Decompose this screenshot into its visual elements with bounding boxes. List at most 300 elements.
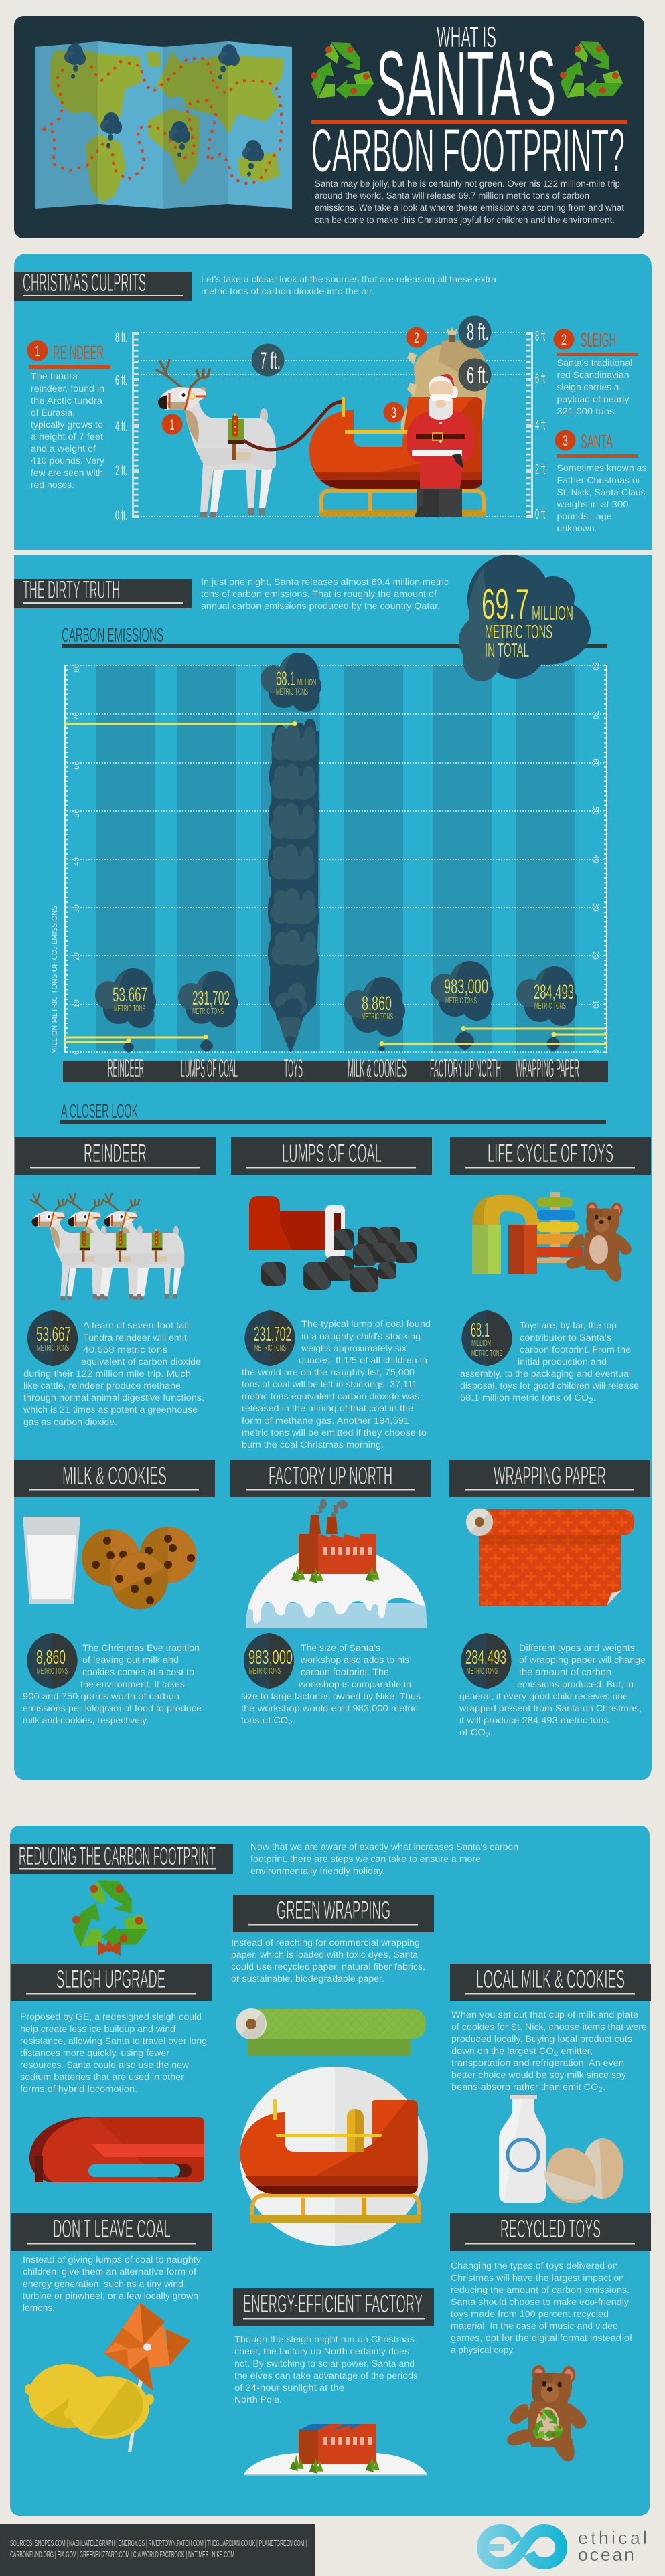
cloud: reindeer: 53,667 <box>113 984 147 1006</box>
stat: 983,000 <box>244 1633 294 1689</box>
culprits intro <box>201 274 497 296</box>
cloud: factory <box>431 961 494 1021</box>
stat: 983,000: 983,000 <box>248 1647 293 1668</box>
stat: 68.1 million: METRIC TONS <box>471 1348 502 1358</box>
text: tons of CO <box>241 1715 285 1725</box>
text <box>23 1643 202 1725</box>
title <box>311 21 627 185</box>
text: which is 21 times as potent a greenhouse <box>23 1405 198 1415</box>
culprits intro: Let's take a closer look at the sources that are releasing all these extra <box>201 274 497 284</box>
world map <box>35 33 292 214</box>
text: could use recycled paper, natural fiber fabrics, <box>231 1962 425 1972</box>
illustration: reindeer <box>157 360 276 517</box>
right axis: 80 <box>591 662 600 671</box>
text: in a naughty child's stocking <box>301 1331 421 1341</box>
label: reindeer: reindeer, found in <box>31 383 104 394</box>
bar chart: carbon emissions <box>50 653 608 1083</box>
text: reducing the amount of carbon emissions. <box>451 2285 630 2295</box>
height scale: 0 ft. <box>115 508 127 523</box>
label: santa: 3 <box>563 432 568 449</box>
reducing intro <box>250 1842 518 1876</box>
text: the workshop would emit 983,000 metric <box>241 1703 418 1713</box>
cloud: toys: METRIC TONS <box>276 686 308 697</box>
card: lumps of coal <box>231 1137 432 1450</box>
card: life cycle of toys <box>450 1137 651 1405</box>
text: weighs approximately six <box>301 1343 407 1353</box>
text: equivalent of carbon dioxide <box>81 1357 201 1367</box>
footer: sources: CARBONFUND.ORG | EIA.GOV | GREENBLIZZARD.COM | CIA WORLD FACTBOOK | NYTIMES | NIKE.COM <box>10 2549 234 2559</box>
illustration: coal cart <box>249 1196 417 1292</box>
height scale: 8 ft. <box>115 330 127 345</box>
title: WHAT IS <box>437 21 496 54</box>
text: toys made from 100 percent recycled <box>451 2309 609 2319</box>
stat: 53,667 <box>27 1310 78 1366</box>
card: energy-efficient factory: ENERGY-EFFICIENT FACTORY <box>243 2290 423 2318</box>
card: sleigh upgrade: SLEIGH UPGRADE <box>56 1966 165 1994</box>
label: santa: unknown. <box>557 523 597 533</box>
illustration: bear with recycle badge <box>507 2365 587 2462</box>
panel: reducing the carbon footprint: REDUCING THE CARBON FOOTPRINT <box>19 1842 216 1871</box>
dirty truth intro: tons of carbon emissions. That is roughly the amount of <box>201 589 437 599</box>
intro text: emissions. We take a look at where these emissions are coming from and what <box>315 203 624 213</box>
stat: 231,702 <box>244 1310 295 1366</box>
label: reindeer: REINDEER <box>53 342 104 364</box>
stat: 284,493: METRIC TONS <box>467 1666 498 1676</box>
text: resistance, allowing Santa to travel over long <box>20 2036 207 2046</box>
right axis: 0 <box>591 1049 600 1053</box>
left axis: 30 <box>72 904 81 913</box>
card: green wrapping <box>231 1895 434 2056</box>
icon: recycle wreath right <box>560 41 623 98</box>
text: Santa should choose to make eco-friendly <box>451 2297 629 2307</box>
stat: 983,000: METRIC TONS <box>249 1666 281 1676</box>
text: a physical copy. <box>451 2345 515 2355</box>
label: sleigh: 321,000 tons. <box>557 406 617 416</box>
header <box>15 1137 216 1175</box>
label: reindeer: typically grows to <box>31 420 103 430</box>
text: cookies comes at a cost to <box>82 1667 194 1677</box>
culprits intro: metric tons of carbon dioxide into the air. <box>201 286 374 296</box>
text: . <box>603 2082 605 2092</box>
height scale: 2 ft. <box>535 462 547 477</box>
left axis: 50 <box>72 809 81 818</box>
text: the amount of carbon <box>519 1667 611 1677</box>
height scale <box>115 329 547 523</box>
right axis: 40 <box>591 855 600 863</box>
heading: reducing the carbon footprint <box>10 1842 233 1874</box>
stat: 53,667: METRIC TONS <box>37 1343 69 1353</box>
label: santa: SANTA <box>581 431 613 453</box>
cloud: lumps of coal: METRIC TONS <box>192 1006 224 1016</box>
left axis: 70 <box>72 712 81 721</box>
stat: 53,667: 53,667 <box>36 1324 71 1345</box>
cloud: wrapping paper: METRIC TONS <box>534 1001 566 1011</box>
text: 40,668 metric tons <box>83 1345 167 1355</box>
text: cheer, the factory up North certainly does <box>234 2346 409 2356</box>
marker: 8 ft: 8 ft. <box>467 319 489 345</box>
height scale: 6 ft. <box>115 373 127 388</box>
text: not. By switching to solar power, Santa and <box>234 2358 415 2369</box>
text: general, if every good child receives one <box>459 1691 628 1701</box>
footer: sources <box>0 2524 315 2576</box>
chart stripes <box>96 665 575 1052</box>
text: form of methane gas. Another 194,591 <box>242 1415 409 1426</box>
text: beans absorb rather than emit CO <box>451 2082 588 2092</box>
text: carbon footprint. From the <box>520 1345 631 1355</box>
panel: the dirty truth and a closer look <box>14 555 652 1780</box>
left axis: 20 <box>72 952 81 961</box>
marker: 8 ft <box>458 316 492 348</box>
label: reindeer: red noses. <box>31 480 74 490</box>
label: santa: pounds– age <box>557 511 612 521</box>
label: sleigh: SLEIGH <box>581 329 616 351</box>
right axis: 30 <box>591 903 600 912</box>
text: distances more quickly, using fewer <box>20 2048 170 2058</box>
text: milk and cookies, respectively. <box>23 1715 149 1725</box>
height scale: 4 ft. <box>115 419 127 434</box>
cloud: toys: MILLION <box>297 677 316 687</box>
text: Instead of reaching for commercial wrapping <box>231 1938 420 1948</box>
illustration: soy milk bottle and beans <box>499 2095 623 2211</box>
illustration: solar factory <box>244 2424 427 2475</box>
illustration: milk and cookies <box>23 1517 197 1609</box>
text: 900 and 750 grams worth of carbon <box>23 1691 179 1701</box>
label: sleigh: sleigh carries a <box>557 382 619 392</box>
cloud: wrapping paper <box>516 966 577 1026</box>
text: gas as carbon dioxide. <box>23 1417 117 1427</box>
text: lemons. <box>23 2303 55 2313</box>
text: workshop is comparable in <box>298 1679 411 1689</box>
label: santa <box>555 430 647 533</box>
text: assembly, to the packaging and eventual <box>460 1369 631 1379</box>
dirty truth intro: annual carbon emissions produced by the country Qatar. <box>201 601 440 611</box>
header <box>449 1460 650 1497</box>
right axis: 10 <box>591 1000 600 1009</box>
right axis: 60 <box>591 758 600 767</box>
category bar: TOYS <box>284 1055 303 1083</box>
chart heading: carbon emissions <box>62 624 607 648</box>
chart heading: carbon emissions: CARBON EMISSIONS <box>62 624 163 647</box>
text <box>241 1643 421 1727</box>
text: . <box>293 1715 295 1725</box>
text: the elves can take advantage of the periods <box>234 2371 418 2381</box>
text: through normal animal digestive functions, <box>23 1393 204 1403</box>
text: 2 <box>598 2086 603 2094</box>
icon: recycle wreath with bow <box>72 1880 148 1956</box>
marker: 2: 2 <box>414 329 419 346</box>
route: dashed sleigh path <box>44 58 282 185</box>
stat: 68.1 million: MILLION <box>471 1338 491 1348</box>
label: reindeer <box>27 340 110 490</box>
cloud: reindeer <box>95 968 156 1028</box>
reducing intro: footprint, there are steps we can take to ensure a more <box>250 1854 481 1864</box>
marker: 2 <box>406 327 427 348</box>
text <box>23 2255 201 2313</box>
cloud: lumps of coal <box>178 971 238 1028</box>
text: of cookies for St. Nick, choose items that were <box>451 2022 647 2032</box>
yellow value lines <box>64 721 607 1046</box>
panel: christmas culprits <box>14 254 652 550</box>
intro text: around the world, Santa will release 69.7 million metric tons of carbon <box>315 191 589 201</box>
heading: the dirty truth: THE DIRTY TRUTH <box>23 576 120 604</box>
text: released in the mining of that coal in the <box>242 1403 413 1413</box>
text <box>459 1643 646 1739</box>
text: The Christmas Eve tradition <box>82 1643 200 1653</box>
text: Changing the types of toys delivered on <box>451 2261 618 2271</box>
stat: 284,493 <box>461 1633 512 1689</box>
text: like cattle, reindeer produce methane <box>23 1381 181 1391</box>
stat: 284,493: 284,493 <box>465 1647 506 1668</box>
height scale: 2 ft. <box>115 463 127 479</box>
text: Different types and weights <box>519 1643 635 1653</box>
card: local milk and cookies <box>450 1964 651 2211</box>
dirty truth intro: In just one night, Santa releases almost 69.4 million metric <box>201 577 449 587</box>
dirty truth intro <box>201 577 449 611</box>
label: sleigh: 2 <box>561 331 567 348</box>
big cloud: 69.7 million metric tons: 69.7 <box>482 580 529 628</box>
height scale: 4 ft. <box>535 418 547 433</box>
card: milk and cookies <box>14 1460 215 1725</box>
logo: ethical ocean: ethical <box>578 2528 647 2548</box>
text: of CO <box>459 1727 483 1737</box>
label: sleigh <box>553 329 638 416</box>
panel: header <box>14 16 644 238</box>
card: don't leave coal: DON’T LEAVE COAL <box>53 2215 171 2243</box>
reducing intro: environmentally friendly holiday. <box>250 1866 385 1876</box>
left axis <box>50 664 81 1055</box>
label: reindeer: 1 <box>35 343 40 359</box>
text <box>20 2012 207 2094</box>
label: reindeer: 410 pounds. Very <box>31 456 104 466</box>
text: children, give them an alternative form of <box>23 2267 196 2277</box>
text: tons of coal will be left in stockings. 37,111 <box>242 1379 417 1389</box>
text: emitter, <box>558 2046 593 2056</box>
category bar: MILK & COOKIES <box>348 1055 407 1083</box>
label: reindeer: The tundra <box>31 371 78 381</box>
cloud: factory: 983,000 <box>444 976 488 998</box>
illustration: factory <box>246 1499 427 1628</box>
cloud: lumps of coal: 231,702 <box>192 987 230 1009</box>
illustration: green paper roll <box>236 2008 426 2056</box>
marker: 6 ft: 6 ft. <box>467 363 489 389</box>
text: When you set out that cup of milk and plate <box>451 2010 638 2020</box>
illustration: sleigh <box>309 397 486 517</box>
header <box>230 1460 431 1497</box>
text: Christmas will have the largest impact on <box>451 2273 624 2283</box>
continents <box>50 50 284 203</box>
text: forms of hybrid locomotion. <box>20 2084 137 2094</box>
text: of wrapping paper will change <box>519 1655 646 1665</box>
text: of 24-hour sunlight at the <box>234 2383 344 2393</box>
text: emissions per kilogram of food to produce <box>23 1703 202 1713</box>
label: sleigh: payload of nearly <box>557 394 630 404</box>
marker: 7 ft <box>252 344 284 376</box>
stat: 8,860: METRIC TONS <box>37 1666 68 1676</box>
rein <box>244 402 344 450</box>
header: MILK & COOKIES <box>62 1462 167 1490</box>
text: energy generation, such as a tiny wind <box>23 2279 183 2289</box>
category bar <box>63 1055 608 1083</box>
cloud: milk and cookies: 8,860 <box>362 993 392 1015</box>
text: Tundra reindeer will emit <box>83 1333 187 1343</box>
right axis: 20 <box>591 951 600 960</box>
text: turbine or pinwheel, or a few locally grown <box>23 2291 198 2301</box>
text: or sustainable, biodegradable paper. <box>231 1974 384 1984</box>
text: during their 122 million mile trip. Much <box>23 1369 191 1379</box>
label: reindeer: of Eurasia, <box>31 408 75 418</box>
card: energy-efficient factory <box>233 2288 434 2475</box>
big cloud: 69.7 million metric tons <box>459 555 591 681</box>
text: of leaving out milk and <box>82 1655 179 1665</box>
text: Proposed by GE, a redesigned sleigh could <box>20 2012 202 2022</box>
cloud: wrapping paper: 284,493 <box>534 981 574 1003</box>
text: down on the largest CO <box>451 2046 546 2056</box>
text: better choice would be soy milk since soy <box>451 2070 626 2080</box>
icon: recycle wreath left <box>311 42 374 99</box>
card: wrapping paper <box>449 1460 650 1739</box>
text: The typical lump of coal found <box>301 1319 431 1329</box>
text <box>231 1938 425 1984</box>
illustration: sack <box>401 327 488 432</box>
height scale: 8 ft. <box>535 329 547 344</box>
illustration: lemons <box>25 2364 154 2439</box>
label: reindeer: the Arctic tundra <box>31 396 103 406</box>
text: 2 <box>486 1731 490 1739</box>
stat: 8,860: 8,860 <box>36 1647 66 1668</box>
label: sleigh: Santa's traditional <box>557 358 632 368</box>
marker: 3: 3 <box>391 404 396 421</box>
label: reindeer: a height of 7 feet <box>31 432 103 442</box>
header: FACTORY UP NORTH <box>269 1462 392 1490</box>
text: Toys are, by far, the top <box>520 1320 617 1330</box>
marker: 1: 1 <box>170 416 174 433</box>
logo: ethical ocean <box>483 2528 647 2565</box>
left axis: 10 <box>72 999 81 1008</box>
left axis: MILLION METRIC TONS OF CO₂ EMISSIONS <box>50 906 59 1054</box>
stat: 68.1 million: 68.1 <box>471 1320 490 1341</box>
left axis: 80 <box>72 664 81 673</box>
text <box>460 1320 639 1405</box>
text: paper, which is loaded with toxic dyes, Santa <box>231 1950 419 1960</box>
logo: ethical ocean: ocean <box>578 2545 634 2565</box>
text: North Pole. <box>234 2395 282 2405</box>
text: initial production and <box>518 1357 607 1367</box>
text: produced locally. Buying local product cuts <box>451 2034 632 2044</box>
right axis: 70 <box>591 711 600 719</box>
intro text <box>315 179 624 225</box>
label: santa: weighs in at 300 <box>556 499 628 509</box>
text: . <box>593 1393 596 1403</box>
illustration: three reindeer <box>31 1193 184 1300</box>
left axis: 40 <box>72 857 81 866</box>
height scale: 0 ft. <box>535 507 547 522</box>
text: The size of Santa's <box>301 1643 380 1653</box>
text: size to large factories owned by Nike. Thus <box>241 1691 421 1701</box>
text: workshop also adds to his <box>300 1655 409 1665</box>
text: . <box>490 1727 493 1737</box>
heading: a closer look <box>60 1100 606 1124</box>
cloud: toys <box>261 653 321 712</box>
right axis <box>591 662 607 1053</box>
big cloud: 69.7 million metric tons: IN TOTAL <box>485 640 529 661</box>
illustration: big sleigh on white egg <box>240 2067 428 2246</box>
stat: 231,702: METRIC TONS <box>254 1343 286 1353</box>
text <box>451 2010 647 2094</box>
card: reindeer <box>15 1137 216 1427</box>
header <box>14 1460 215 1497</box>
icon: smoke clouds on map <box>64 44 264 177</box>
illustration: pinwheel <box>104 2302 190 2452</box>
big cloud: 69.7 million metric tons: METRIC TONS <box>485 622 552 643</box>
text: emissions produced. But, in <box>517 1679 634 1689</box>
stat: 8,860 <box>27 1633 78 1689</box>
intro text: can be done to make this Christmas joyful for children and the environment. <box>315 215 615 225</box>
heading: christmas culprits: CHRISTMAS CULPRITS <box>23 269 146 297</box>
right axis: 50 <box>591 806 600 815</box>
text: help create less ice buildup and wind <box>20 2024 175 2034</box>
text: contributor to Santa's <box>520 1333 611 1343</box>
label: santa: Sometimes known as <box>557 463 647 473</box>
cloud: reindeer: METRIC TONS <box>114 1003 145 1013</box>
card: don't leave coal <box>11 2213 212 2452</box>
footer: sources: SOURCES: SNOPES.COM | NASHUATELEGRAPH | ENERGY.GS | RIVERTOWN.PATCH.COM | THEGUARDIAN.CO.UK | PLANETGREEN.COM | <box>10 2538 307 2548</box>
category bar: LUMPS OF COAL <box>181 1055 238 1083</box>
text: games, opt for the digital format instead of <box>451 2333 632 2343</box>
text: 2 <box>589 1397 593 1405</box>
marker: 3 <box>383 402 404 423</box>
teardrops <box>123 1031 560 1053</box>
label: santa: St. Nick, Santa Claus <box>557 487 646 497</box>
text: the environment. It takes <box>80 1679 185 1689</box>
text: the world are on the naughty list, 75,000 <box>242 1367 415 1377</box>
header <box>450 1137 651 1175</box>
card: green wrapping: GREEN WRAPPING <box>277 1897 390 1925</box>
text: sodium batteries that are used in other <box>20 2072 185 2082</box>
left axis: 0 <box>72 1051 81 1055</box>
text: resources. Santa could also use the new <box>20 2060 189 2070</box>
card: sleigh upgrade <box>11 1964 212 2182</box>
illustration: wrapping paper roll <box>466 1509 634 1606</box>
text: Instead of giving lumps of coal to naughty <box>23 2255 201 2265</box>
text <box>242 1319 431 1450</box>
text: 2 <box>554 2050 558 2058</box>
header <box>231 1137 432 1175</box>
intro text: Santa may be jolly, but he is certainly not green. Over his 122 million-mile trip <box>315 179 620 189</box>
card: recycled toys <box>450 2213 651 2462</box>
label: santa: Father Christmas or <box>557 475 641 485</box>
marker: 6 ft <box>458 359 492 391</box>
header: REINDEER <box>84 1140 147 1168</box>
header: LUMPS OF COAL <box>282 1140 382 1168</box>
heading: a closer look: A CLOSER LOOK <box>61 1100 138 1122</box>
text: 68.1 million metric tons of CO <box>460 1393 579 1403</box>
text: material. In the case of music and video <box>451 2321 618 2331</box>
cloud: toys: 68.1 <box>276 668 295 690</box>
text: 2 <box>288 1719 293 1727</box>
text <box>234 2334 418 2405</box>
smoke column: toys <box>268 719 319 1052</box>
text: burn the coal Christmas morning. <box>242 1440 384 1450</box>
reducing intro: Now that we are aware of exactly what increases Santa's carbon <box>250 1842 518 1852</box>
category bar: REINDEER <box>108 1055 144 1083</box>
text: wrapped present from Santa on Christmas, <box>459 1703 642 1713</box>
illustration: toys <box>472 1192 632 1282</box>
marker: 1 <box>162 414 182 435</box>
illustration: santa <box>407 374 475 517</box>
text <box>23 1320 204 1427</box>
text: it will produce 284,493 metric tons <box>459 1715 609 1725</box>
heading: christmas culprits <box>14 269 192 301</box>
